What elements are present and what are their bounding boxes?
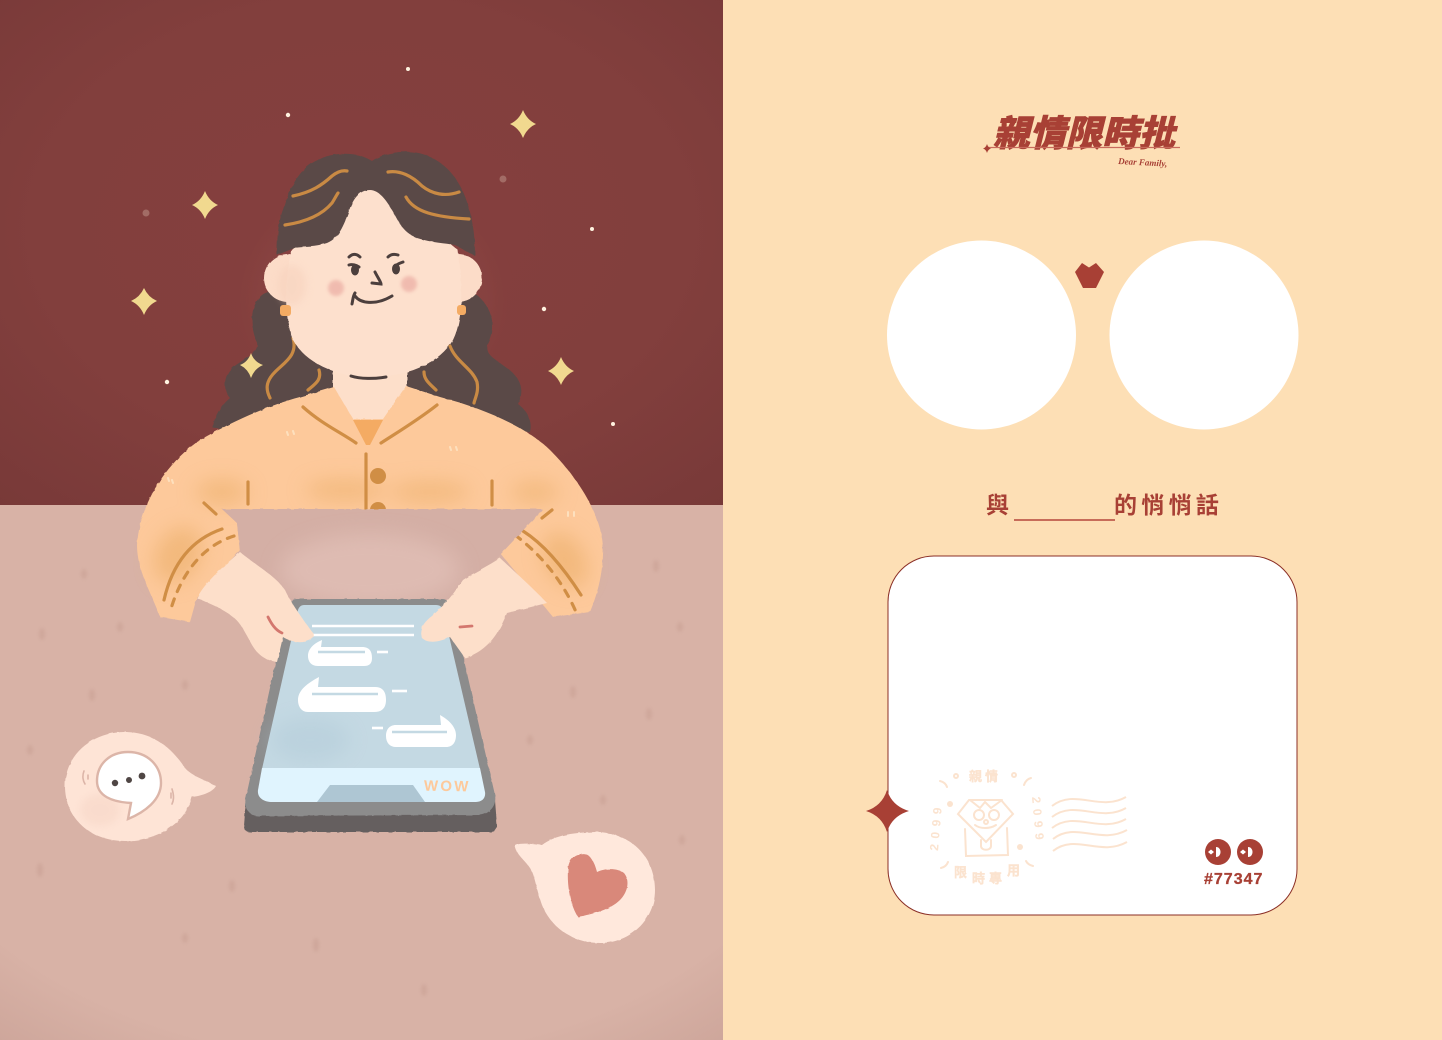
- dots: [112, 773, 145, 786]
- heading: [986, 492, 1223, 520]
- screen shading: [270, 718, 350, 762]
- logo: [983, 105, 1185, 169]
- neck: [333, 365, 407, 422]
- stamp asterisk right: [1017, 844, 1023, 850]
- card star: [866, 790, 909, 832]
- phone body: [245, 599, 495, 816]
- halo around head: [247, 190, 497, 410]
- collar and seams: [164, 405, 581, 612]
- right cheek: [401, 276, 417, 292]
- postmark stamp: [927, 769, 1047, 886]
- badge left: [1205, 839, 1231, 865]
- phone base: [244, 800, 497, 832]
- left eye: [351, 264, 359, 276]
- table background: [0, 505, 723, 1040]
- page background: [723, 0, 1442, 1040]
- front hair: [277, 152, 475, 256]
- speech bubble: chat: [65, 732, 216, 841]
- face: [264, 182, 482, 377]
- sweater shading: [144, 480, 597, 596]
- right earring: [457, 305, 466, 315]
- back hair strands: [267, 338, 478, 403]
- finger marks: [268, 617, 472, 633]
- chat bubble 1: [308, 640, 388, 666]
- badge icons: [1205, 839, 1263, 865]
- logo subtitle: Dear Family,: [1117, 156, 1168, 169]
- bottom notch: [317, 785, 425, 802]
- stamp right year: 2099: [1029, 796, 1047, 846]
- stamp bottom text: [954, 863, 1020, 886]
- logo underline: [987, 146, 1180, 148]
- buttons: [370, 468, 386, 518]
- table specks: [27, 560, 685, 996]
- photo circle left: [887, 240, 1076, 430]
- right eye: [392, 264, 400, 274]
- sweater highlights: [168, 431, 574, 516]
- chat bubble 2: [298, 677, 407, 712]
- message card: [888, 556, 1297, 915]
- sparkle over hair: [240, 353, 263, 378]
- undershirt: [353, 420, 383, 445]
- speech bubble: heart: [515, 832, 655, 943]
- stamp left year: 2099: [927, 802, 945, 851]
- badge right: [1237, 839, 1263, 865]
- bubble body: [515, 832, 655, 943]
- heading prefix: 與: [986, 492, 1009, 518]
- left earring: [280, 305, 291, 316]
- back hair: [213, 284, 531, 440]
- phone: [244, 599, 497, 832]
- bubble body: [65, 732, 216, 841]
- right ear: [434, 254, 482, 302]
- stamp arcs and mascot: [940, 773, 1033, 868]
- hair strands: [285, 171, 469, 225]
- chat bubble 3: [372, 715, 456, 747]
- ear shading: [278, 265, 306, 305]
- facial features: [349, 254, 403, 378]
- logo star: [983, 144, 991, 153]
- screen bottom band: [258, 768, 485, 802]
- wall background: [0, 0, 723, 506]
- stamp bottom text: 限: [954, 865, 967, 880]
- heading suffix: 的悄悄話: [1114, 492, 1223, 518]
- photo circle right: [1110, 240, 1298, 430]
- sound marks: [83, 771, 174, 804]
- stamp asterisk left: [947, 801, 953, 807]
- left ear: [264, 254, 312, 302]
- postmark waves: [1052, 797, 1127, 851]
- heart: [1075, 263, 1104, 288]
- left hand: [197, 552, 313, 662]
- character: [137, 152, 603, 622]
- stamp bottom text: 用: [1007, 863, 1020, 878]
- table gap between arms: [222, 509, 543, 605]
- left cheek: [328, 280, 344, 296]
- code number: #77347: [1204, 871, 1263, 888]
- logo title: 親情限時批: [990, 105, 1185, 157]
- header lines: [310, 626, 414, 635]
- sweater body: [137, 386, 603, 622]
- stamp top text: 親情: [969, 769, 1001, 784]
- badge left mark: [1208, 847, 1220, 857]
- sparkles: [131, 110, 574, 385]
- phone screen: [262, 605, 480, 769]
- bubble shading: [80, 794, 120, 826]
- panel: right page: [723, 0, 1442, 1040]
- stamp bottom text: 時: [972, 871, 985, 886]
- blank line: [1014, 519, 1115, 521]
- wall dots: [142, 67, 615, 426]
- panel: illustration: [0, 0, 723, 1040]
- head: [286, 182, 461, 377]
- heart: [568, 854, 627, 917]
- hands: [197, 552, 547, 662]
- WOW label: WOW: [424, 778, 471, 795]
- inner speech icon: [97, 752, 161, 819]
- badge right mark: [1240, 847, 1252, 857]
- stamp bottom text: 專: [989, 871, 1002, 886]
- right hand: [421, 558, 547, 658]
- table gap glow: [280, 534, 460, 606]
